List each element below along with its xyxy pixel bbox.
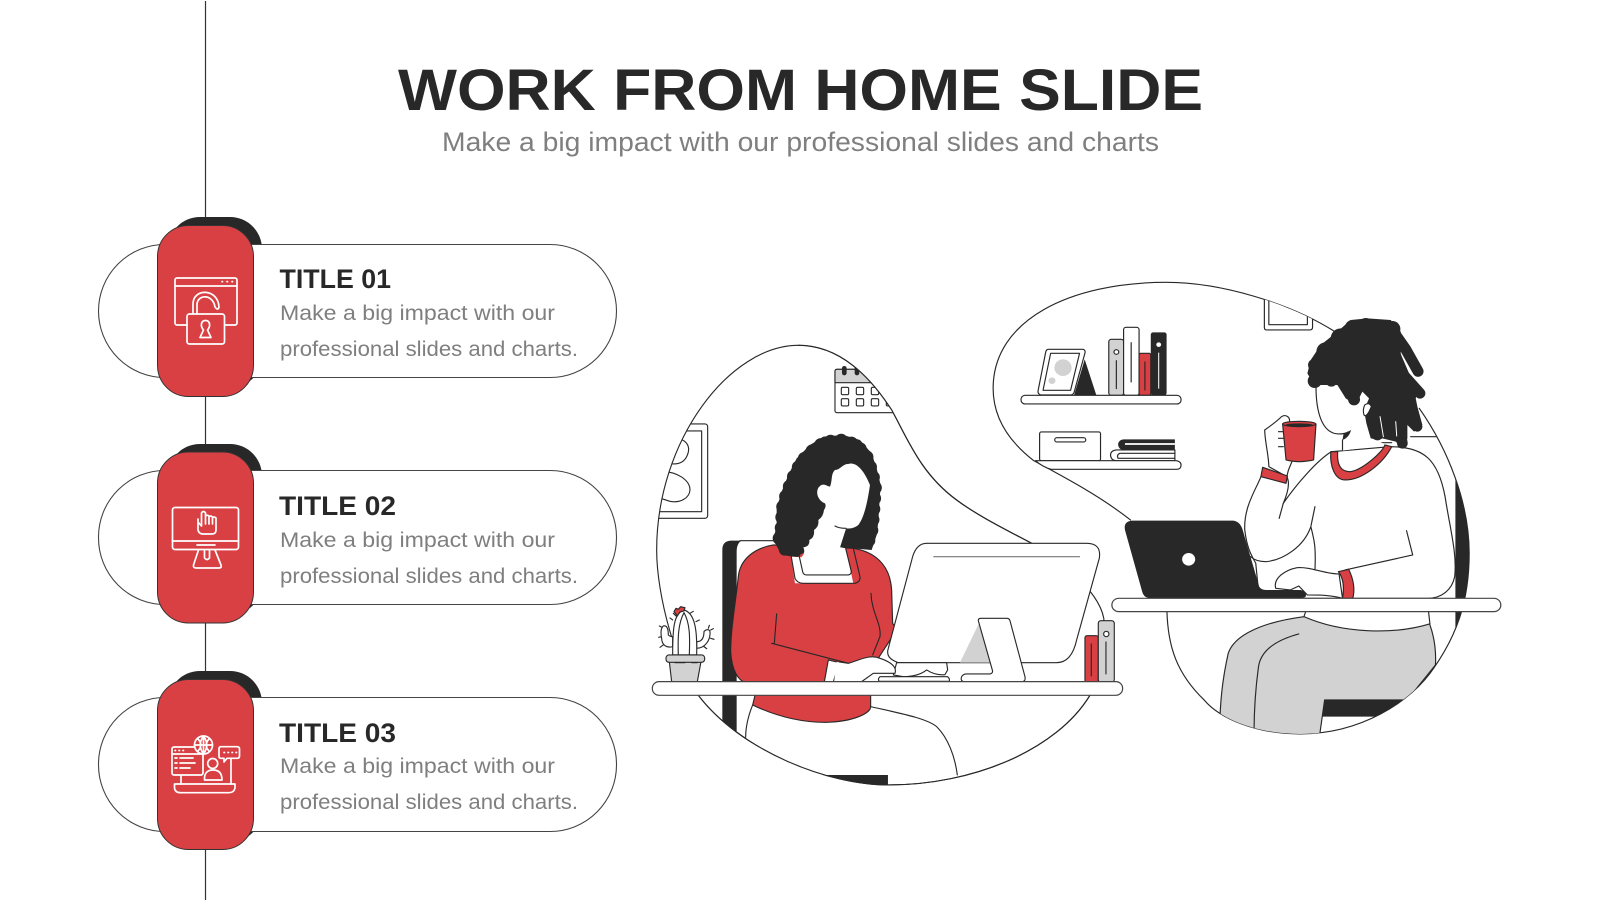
face and neck (1316, 383, 1387, 451)
lap lines under desk (1304, 612, 1430, 624)
wall frame, chair and seat (1264, 290, 1473, 717)
ear (1363, 404, 1371, 416)
body text: professional slides and charts. (280, 790, 578, 814)
icon: monitor with pointing hand (172, 508, 238, 568)
body text: professional slides and charts. (280, 337, 578, 361)
heading: TITLE 03 (279, 718, 396, 748)
heading: TITLE 02 (279, 491, 396, 521)
card shadow (168, 671, 262, 842)
wall frame and calendar (659, 366, 893, 784)
panel: item 03 (98, 671, 616, 850)
pill outline (98, 698, 616, 832)
chin line (835, 526, 846, 528)
icon: online meeting laptop (172, 736, 240, 793)
keyboard (878, 677, 949, 681)
body text: Make a big impact with our (280, 301, 555, 325)
cactus (659, 607, 714, 682)
pill outline (98, 244, 616, 378)
body text (280, 754, 578, 814)
chair (722, 540, 741, 732)
panel: item 01 (98, 217, 616, 396)
red icon card (158, 226, 254, 396)
body text: professional slides and charts. (280, 564, 578, 588)
body text (280, 528, 578, 588)
seated legs (746, 705, 957, 783)
white sweater (1245, 447, 1455, 598)
desk (1112, 598, 1501, 612)
hair (773, 435, 881, 557)
red icon card (158, 680, 254, 850)
desk books (1085, 621, 1114, 682)
illustration: woman at desktop computer (647, 345, 1123, 788)
title: WORK FROM HOME SLIDE (398, 58, 1203, 123)
body text: Make a big impact with our (280, 528, 555, 552)
vertical timeline line (204, 1, 206, 900)
outline restored over clipped art (698, 345, 1090, 785)
raised hand, mug and cuff (1261, 416, 1316, 483)
laptop (1125, 521, 1306, 598)
heading: TITLE 01 (280, 264, 391, 294)
upper shelf with frame and books (1021, 327, 1181, 404)
body text (280, 301, 578, 361)
face and neck (791, 464, 870, 583)
red icon card (158, 452, 254, 623)
red sweater (731, 545, 897, 722)
typing hand and cuff (1275, 568, 1354, 598)
hands and cuff (824, 657, 948, 683)
icon: browser with open padlock (175, 278, 237, 344)
red neckline (1331, 445, 1392, 480)
back wall ledge (1375, 437, 1436, 443)
hair (1307, 318, 1422, 448)
grey trousers (1220, 617, 1436, 737)
panel: item 02 (98, 444, 616, 623)
body text: Make a big impact with our (280, 754, 555, 778)
card shadow (168, 217, 262, 388)
illustration: woman with laptop and mug (993, 282, 1501, 737)
square collar (791, 548, 860, 583)
subtitle: Make a big impact with our professional slides and charts (442, 127, 1159, 157)
blob background (993, 282, 1469, 734)
lower shelf with box and books (1035, 432, 1181, 469)
monitor (888, 543, 1100, 682)
blob background (657, 345, 1105, 785)
sweater details (772, 593, 880, 663)
pill outline (98, 470, 616, 604)
card shadow (168, 444, 262, 615)
desk (652, 682, 1123, 695)
